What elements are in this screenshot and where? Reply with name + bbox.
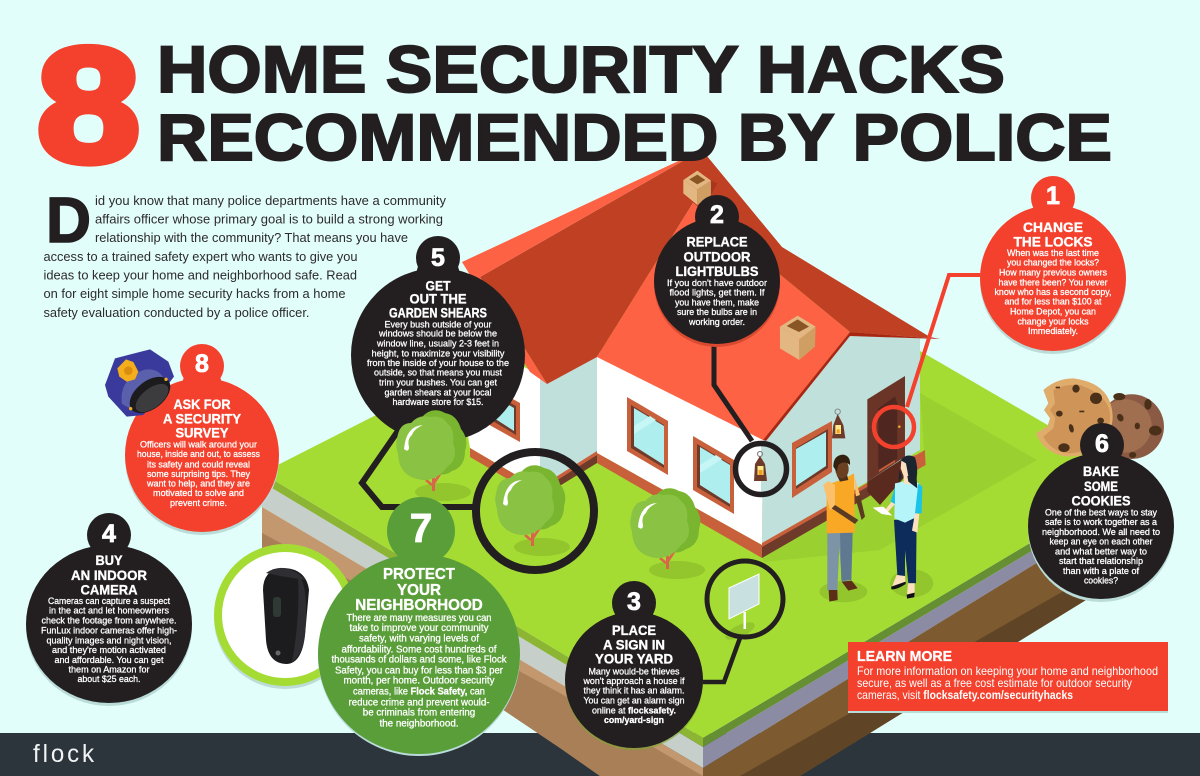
body: safety, with varying levels of [359, 634, 479, 645]
body: motivated to solve and [153, 487, 244, 498]
body: have there been? You never [998, 276, 1108, 287]
learn more text: secure, as well as a free cost estimate for outdoor security [857, 676, 1132, 690]
body: check the footage from anywhere. [42, 615, 176, 626]
right blue wall [762, 332, 920, 545]
body: thousands of dollars and some, like Flock [332, 655, 507, 666]
heading: GET [426, 278, 451, 294]
body: and affordable. You can get [54, 654, 164, 665]
body: Home Depot, you can [1010, 306, 1096, 317]
heading: AN INDOOR [71, 567, 147, 583]
body: outside, so that means you must [374, 367, 502, 378]
body: start that relationship [1059, 555, 1143, 566]
bubble [654, 195, 780, 347]
learn more heading: LEARN MORE [857, 648, 952, 665]
body: prevent crime. [170, 497, 227, 508]
heading: BAKE [1083, 463, 1119, 479]
drop cap: D [46, 184, 91, 256]
number: 3 [627, 588, 641, 616]
icon: indoor camera [263, 568, 309, 664]
callout 5 [351, 236, 525, 442]
body: neighborhood. We all need to [1042, 526, 1160, 537]
body: garden shears at your local [384, 387, 492, 398]
number: 1 [1046, 182, 1060, 210]
body: from the inside of your house to the [367, 357, 509, 368]
big number 8: 8 [37, 15, 140, 196]
body: reduce crime and prevent would- [348, 697, 490, 708]
body: How many previous owners [999, 267, 1107, 278]
body: and they're motion activated [52, 644, 166, 655]
learn more text [857, 664, 1158, 702]
body: month, per home. Outdoor security [344, 676, 495, 687]
body: them on Amazon for [68, 664, 150, 675]
heading: A SECURITY [163, 410, 242, 426]
intro text: access to a trained safety expert who wants to give you [44, 249, 358, 264]
body: working order. [688, 316, 745, 327]
body [367, 318, 509, 407]
heading [1072, 463, 1130, 508]
bubble [1028, 423, 1174, 602]
body: You can get an alarm sign [584, 694, 684, 705]
heading: SOME [1084, 478, 1118, 494]
windows [475, 378, 832, 514]
body: com/yard-sign [604, 714, 664, 725]
heading: OUTDOOR [684, 249, 750, 265]
chimneys [683, 171, 816, 360]
magnifier: tree [476, 452, 594, 570]
magnifier: yard sign [707, 561, 783, 643]
intro text: affairs officer whose primary goal is to build a strong working [95, 212, 443, 226]
body: There are many measures you can [346, 613, 492, 624]
title [37, 15, 1112, 196]
magnifier: lantern [736, 444, 786, 494]
number: 4 [102, 520, 116, 548]
body: If you don't have outdoor [667, 277, 767, 288]
body: sure the bulbs are in [677, 306, 757, 317]
callout 4 [26, 513, 192, 706]
body: you have them, make [675, 296, 759, 307]
heading: YOUR [397, 582, 441, 599]
bubble [565, 581, 703, 750]
body: know who has a second copy, [994, 286, 1112, 297]
front white wall [597, 350, 763, 545]
body: One of the best ways to stay [1045, 506, 1157, 517]
heading [1014, 219, 1092, 250]
learn more text: For more information on keeping your home and neighborhood [857, 664, 1158, 678]
intro text [44, 193, 446, 320]
heading: CAMERA [80, 581, 138, 597]
body: Every bush outside of your [384, 318, 492, 329]
body [332, 613, 507, 729]
heading [595, 622, 673, 667]
heading: REPLACE [686, 234, 748, 250]
icon: cookies [1036, 378, 1164, 459]
icon: police hat [105, 349, 177, 420]
body: affordability. Some cost hundreds of [342, 645, 497, 656]
body: you changed the locks? [1007, 257, 1099, 268]
left white wall [450, 330, 540, 489]
bubble [26, 513, 192, 706]
connector: lightbulb line [714, 335, 752, 441]
recessed blue wall [540, 350, 597, 489]
title line 1: HOME SECURITY HACKS [157, 32, 1005, 106]
body: want to help, and they are [146, 478, 250, 489]
body: safe is to work together as a [1045, 516, 1158, 527]
number: 2 [710, 201, 724, 229]
heading: BUY [96, 552, 123, 568]
wall lantern [832, 409, 845, 438]
body: trim your bushes. You can get [379, 377, 497, 388]
callout 1 [980, 176, 1126, 354]
body: quality images and night vision, [46, 634, 172, 645]
camera inset [214, 547, 356, 689]
heading: PROTECT [383, 566, 455, 583]
body: height, to maximize your visibility [372, 348, 505, 359]
body: hardware store for $15. [392, 396, 484, 407]
tree 1 [396, 410, 471, 501]
callout 6 [1028, 423, 1174, 602]
bubble [980, 176, 1126, 354]
man [819, 455, 867, 602]
heading [163, 396, 242, 441]
body [1042, 506, 1160, 586]
footer bar [0, 733, 1200, 776]
body: flood lights, get them. If [670, 287, 765, 298]
body: take to improve your community [350, 623, 489, 634]
heading: CHANGE [1023, 219, 1083, 235]
number: 6 [1095, 430, 1109, 458]
callout 7 [318, 497, 520, 756]
number: 8 [195, 350, 209, 378]
intro text: relationship with the community? That means you have [95, 230, 408, 245]
body: and what better way to [1055, 545, 1147, 556]
body: online at flocksafety. [592, 704, 676, 715]
learn more panel [848, 642, 1168, 713]
heading: GARDEN SHEARS [389, 305, 487, 321]
heading: OUT THE [410, 290, 466, 306]
heading [71, 552, 147, 597]
tree 3 [630, 488, 705, 579]
intro text: on for eight simple home security hacks from a home [44, 286, 346, 301]
learn more text: cameras, visit flocksafety.com/securityhacks [857, 688, 1073, 702]
roof [462, 150, 940, 441]
heading: ASK FOR [174, 396, 230, 412]
heading [389, 278, 487, 321]
callout 2 [654, 195, 780, 347]
body: window line, usually 2-3 feet in [376, 338, 499, 349]
body [137, 439, 260, 508]
bubble [125, 344, 279, 535]
footer logo: flock [33, 740, 97, 768]
body: Cameras can capture a suspect [48, 595, 170, 606]
magnifier: door lock [874, 407, 914, 447]
woman [873, 456, 933, 599]
body: Immediately. [1028, 325, 1078, 336]
intro paragraph [44, 184, 446, 320]
people [819, 455, 933, 602]
number: 5 [431, 244, 445, 272]
body: house, inside and out, to assess [137, 448, 260, 459]
heading: COOKIES [1072, 492, 1130, 508]
body: about $25 each. [78, 673, 140, 684]
bubble [351, 236, 525, 442]
body: change your locks [1018, 315, 1089, 326]
body: FunLux indoor cameras offer high- [41, 625, 177, 636]
title line 2: RECOMMENDED BY POLICE [157, 100, 1112, 174]
body: cameras, like Flock Safety, can [353, 687, 485, 698]
heading: THE LOCKS [1014, 234, 1092, 250]
number: 7 [410, 505, 432, 551]
heading: PLACE [612, 622, 656, 638]
body: in the act and let homeowners [49, 605, 169, 616]
callout 8 [125, 344, 279, 535]
body: be criminals from entering [363, 708, 476, 719]
callout 3 [565, 581, 703, 750]
body [583, 665, 685, 725]
heading: YOUR YARD [595, 651, 673, 667]
heading: LIGHTBULBS [676, 263, 758, 279]
intro text: ideas to keep your home and neighborhood safe. Read [44, 268, 357, 283]
body [994, 247, 1112, 336]
body: Officers will walk around your [140, 439, 257, 450]
wall base trim [470, 448, 925, 558]
body: its safety and could reveal [147, 458, 250, 469]
isometric lawn block [262, 221, 1139, 776]
body: keep an eye on each other [1050, 536, 1152, 547]
body: they think it has an alarm. [584, 685, 684, 696]
door [867, 376, 926, 505]
body: When was the last time [1007, 247, 1099, 258]
body: Many would-be thieves [588, 665, 680, 676]
heading: A SIGN IN [603, 636, 665, 652]
body: windows should be below the [378, 328, 497, 339]
connector: lock line [907, 275, 985, 407]
heading: NEIGHBORHOOD [355, 597, 483, 614]
intro text: safety evaluation conducted by a police officer. [44, 305, 310, 320]
body [667, 277, 767, 327]
body [41, 595, 177, 684]
heading [676, 234, 758, 279]
connector: garden line [362, 428, 478, 507]
heading: SURVEY [176, 425, 229, 441]
bubble [318, 497, 520, 756]
body: some surprising tips. They [147, 468, 250, 479]
house [450, 150, 940, 558]
body: the neighborhood. [380, 718, 458, 729]
body: cookies? [1084, 575, 1118, 586]
intro text: id you know that many police departments have a community [95, 193, 446, 208]
connector: sign line [700, 638, 740, 682]
body: than with a plate of [1063, 565, 1139, 576]
body: and for less than $100 at [1004, 296, 1102, 307]
body: Safety, you can buy for less than $3 per [335, 665, 504, 676]
heading [355, 566, 483, 614]
body: won't approach a house if [583, 675, 685, 686]
